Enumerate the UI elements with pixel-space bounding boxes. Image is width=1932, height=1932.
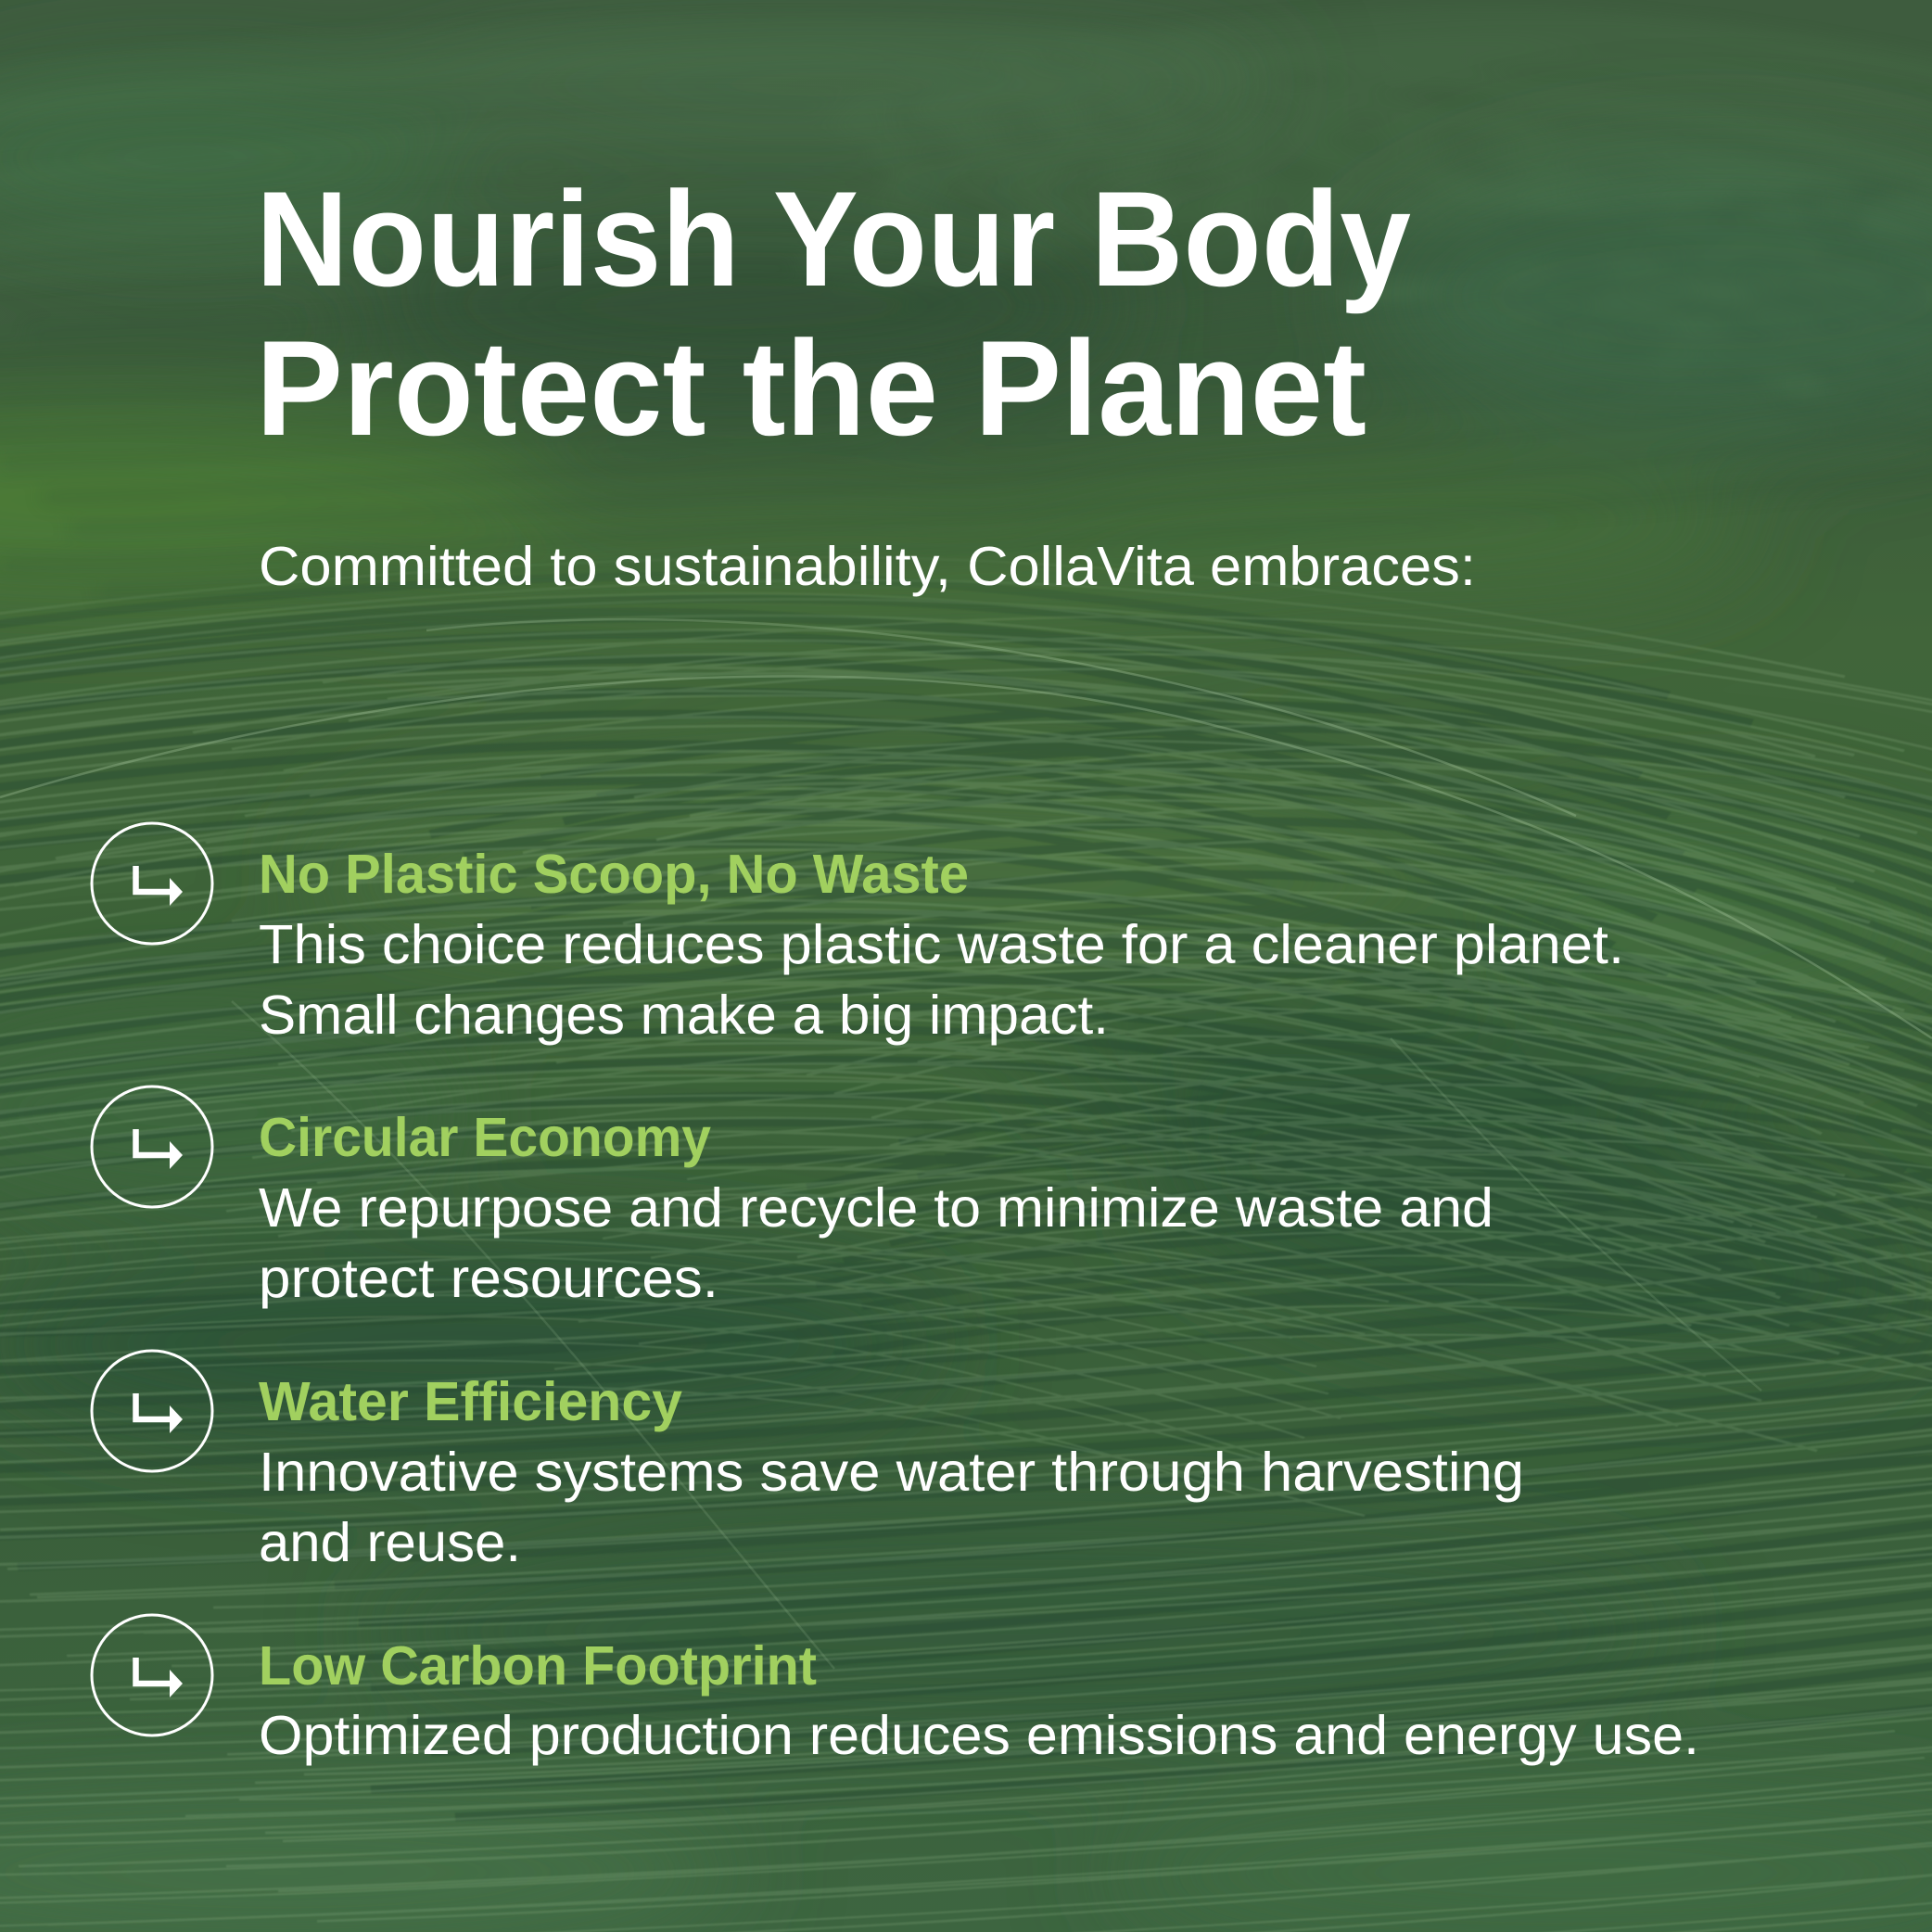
item description [259, 1442, 1524, 1573]
item description: Small changes make a big impact. [259, 985, 1109, 1046]
icon: arrow in circle [92, 823, 212, 944]
item description: protect resources. [259, 1248, 718, 1309]
title: Nourish Your Body [256, 163, 1411, 314]
light grass strands [0, 557, 1932, 1932]
item heading: Low Carbon Footprint [259, 1635, 817, 1697]
title [256, 163, 1411, 464]
list item: No Plastic Scoop, No Waste [92, 823, 1624, 1046]
item description [259, 914, 1624, 1046]
item heading: Circular Economy [259, 1107, 711, 1168]
subtitle: Committed to sustainability, CollaVita embraces: [259, 536, 1476, 597]
icon: arrow in circle [92, 1087, 212, 1207]
list item: Water Efficiency [92, 1351, 1524, 1573]
item description: Innovative systems save water through harvesting [259, 1442, 1524, 1503]
title: Protect the Planet [256, 312, 1366, 464]
item description [259, 1177, 1493, 1309]
item description: This choice reduces plastic waste for a cleaner planet. [259, 914, 1624, 975]
item description: Optimized production reduces emissions and energy use. [259, 1705, 1699, 1766]
icon: arrow in circle [92, 1351, 212, 1471]
bright single blades [0, 619, 1932, 1669]
item description: and reuse. [259, 1512, 521, 1573]
icon: arrow in circle [92, 1615, 212, 1735]
list item: Circular Economy [92, 1087, 1493, 1309]
item heading: No Plastic Scoop, No Waste [259, 844, 969, 905]
dark strand shadows [0, 576, 1932, 1817]
item description: We repurpose and recycle to minimize waste and [259, 1177, 1493, 1239]
list item: Low Carbon Footprint [92, 1615, 1699, 1766]
item heading: Water Efficiency [259, 1371, 682, 1432]
soft upper strands [0, 18, 1932, 593]
